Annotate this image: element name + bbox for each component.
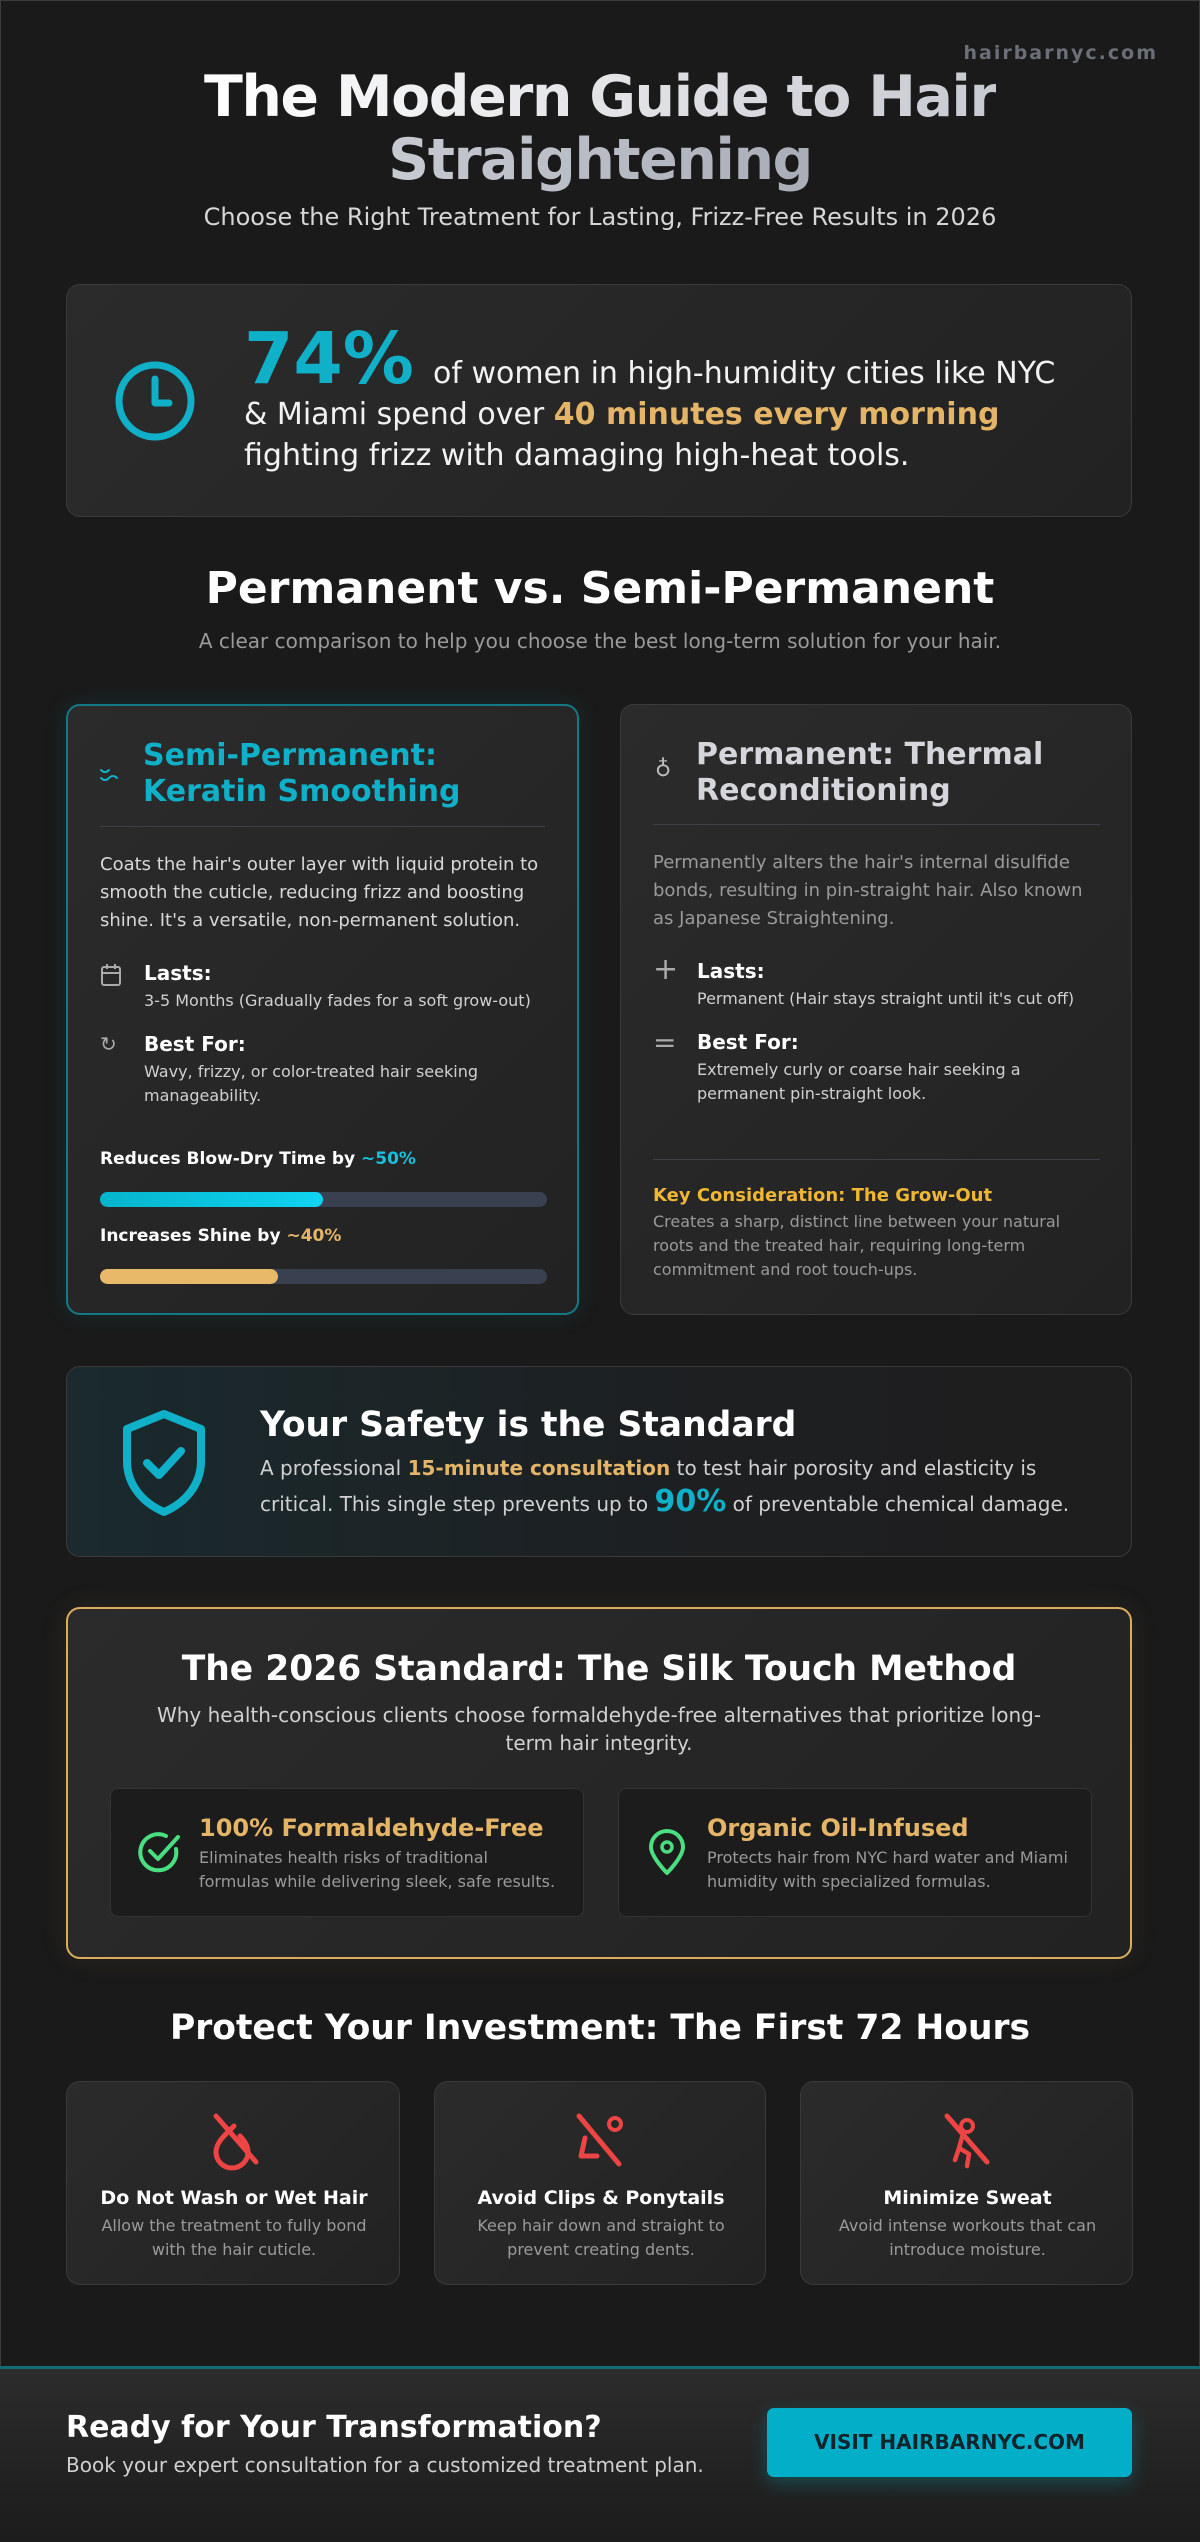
- feature: formaldehyde-free: Eliminates health risks of traditional formulas while delivering sleek, safe results.: [199, 1848, 555, 1891]
- panel: semi-permanent: Wavy, frizzy, or color-treated hair seeking manageability.: [144, 1062, 478, 1105]
- feature: formaldehyde-free: [110, 1788, 584, 1917]
- heading: The 2026 Standard: The Silk Touch Method: [182, 1649, 1016, 1689]
- card: no clips: Keep hair down and straight to prevent creating dents.: [477, 2216, 725, 2259]
- feature: oil-infused: Protects hair from NYC hard water and Miami humidity with specialized formulas.: [707, 1848, 1068, 1891]
- description: Coats the hair's outer layer with liquid protein to smooth the cuticle, reducing frizz and boosting shine. It's a versatile, non-permanent solution.: [100, 854, 538, 931]
- icon: no workout: [944, 2114, 990, 2168]
- title: [204, 64, 996, 193]
- panel: semi-permanent: 3-5 Months (Gradually fades for a soft grow-out): [144, 991, 531, 1010]
- heading: Permanent: Thermal: [696, 737, 1043, 772]
- card: no clips: Avoid Clips & Ponytails: [478, 2187, 724, 2209]
- bar: shine: Increases Shine by ~40%: [100, 1226, 341, 1246]
- panel: permanent: Lasts:: [697, 959, 765, 983]
- description: Permanently alters the hair's internal disulfide bonds, resulting in pin-straight hair. Also known as Japanese Straightening.: [653, 852, 1083, 929]
- panel: permanent: Permanent (Hair stays straight until it's cut off): [697, 989, 1074, 1008]
- card: no clips: [434, 2081, 766, 2285]
- title: The Modern Guide to Hair: [204, 64, 996, 130]
- heading: Semi-Permanent:: [143, 738, 437, 773]
- heading: comparison: Permanent vs. Semi-Permanent: [206, 563, 994, 614]
- icon: no water: [214, 2114, 258, 2170]
- icon: waves: [100, 769, 118, 781]
- best for: [653, 1026, 1021, 1103]
- button: [767, 2408, 1132, 2477]
- panel: semi-permanent: Lasts:: [144, 961, 212, 985]
- icon: shield: [123, 1410, 205, 1516]
- panel: silk touch: [66, 1607, 1132, 1959]
- card: no wash: Allow the treatment to fully bond with the hair cuticle.: [101, 2216, 367, 2259]
- heading: [696, 737, 1043, 808]
- panel: permanent: +: [653, 952, 678, 987]
- panel: permanent: Best For:: [697, 1030, 799, 1054]
- icon: clock: [116, 362, 194, 440]
- footer: [0, 2366, 1200, 2542]
- feature: formaldehyde-free: 100% Formaldehyde-Free: [199, 1814, 544, 1842]
- bar: blow-dry: [100, 1149, 547, 1207]
- panel: semi-permanent: ↻: [100, 1032, 117, 1056]
- stat text: 74% of women in high-humidity cities like NYC & Miami spend over 40 minutes every morning fighting frizz with damaging high-heat tools.: [244, 317, 1055, 473]
- key consideration: Creates a sharp, distinct line between your natural roots and the treated hair, requiring long-term commitment and root touch-ups.: [653, 1212, 1060, 1279]
- bar: shine: [100, 1226, 547, 1284]
- key consideration: Key Consideration: The Grow-Out: [653, 1185, 992, 1206]
- panel: semi-permanent: [66, 704, 579, 1315]
- feature: oil-infused: [618, 1788, 1092, 1917]
- icon: ♁: [655, 757, 671, 782]
- text: A professional 15-minute consultation to test hair porosity and elasticity is critical. This single step prevents up to 90% of preventable chemical damage.: [260, 1456, 1069, 1519]
- panel: statistic: [66, 284, 1132, 517]
- subtitle: Choose the Right Treatment for Lasting, Frizz-Free Results in 2026: [204, 203, 996, 231]
- lasts: [101, 961, 531, 1010]
- heading: Keratin Smoothing: [143, 774, 460, 809]
- card: no sweat: [800, 2081, 1133, 2285]
- site url: hairbarnyc.com: [963, 42, 1158, 64]
- card: no sweat: Minimize Sweat: [883, 2187, 1052, 2209]
- footer subtext: Book your expert consultation for a customized treatment plan.: [66, 2453, 704, 2477]
- comparison subtitle: A clear comparison to help you choose the best long-term solution for your hair.: [199, 629, 1001, 653]
- title: Straightening: [388, 127, 812, 193]
- subtitle: Why health-conscious clients choose formaldehyde-free alternatives that prioritize long-term hair integrity.: [157, 1703, 1041, 1755]
- card: no wash: [66, 2081, 400, 2285]
- panel: permanent: =: [653, 1026, 676, 1059]
- card: no wash: Do Not Wash or Wet Hair: [100, 2187, 368, 2209]
- card: no sweat: Avoid intense workouts that can introduce moisture.: [839, 2216, 1096, 2259]
- best for: [100, 1032, 478, 1105]
- icon: check: [138, 1832, 180, 1872]
- heading: [143, 738, 460, 809]
- button: VISIT HAIRBARNYC.COM: [814, 2430, 1085, 2454]
- icon: no clips: [576, 2114, 623, 2166]
- panel: permanent: [620, 704, 1132, 1315]
- panel: semi-permanent: Best For:: [144, 1032, 246, 1056]
- bar: blow-dry: Reduces Blow-Dry Time by ~50%: [100, 1149, 416, 1169]
- heading: Reconditioning: [696, 773, 951, 808]
- panel: permanent: Extremely curly or coarse hair seeking a permanent pin-straight look.: [697, 1060, 1021, 1103]
- icon: pin: [649, 1829, 685, 1876]
- lasts: [653, 952, 1074, 1008]
- feature: oil-infused: Organic Oil-Infused: [707, 1814, 969, 1842]
- heading: aftercare: Protect Your Investment: The First 72 Hours: [170, 2008, 1030, 2048]
- panel: safety: [66, 1366, 1132, 1557]
- footer heading: Ready for Your Transformation?: [66, 2410, 602, 2445]
- heading: Your Safety is the Standard: [260, 1405, 796, 1445]
